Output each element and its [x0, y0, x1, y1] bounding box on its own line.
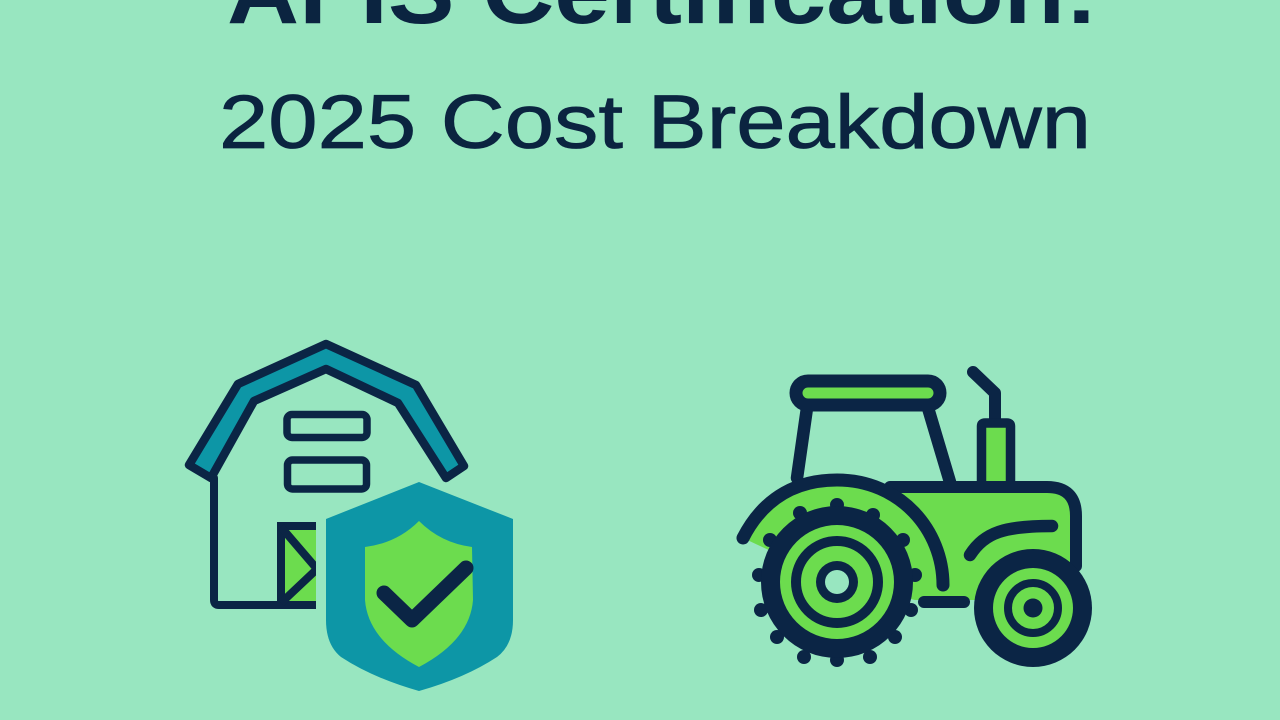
- tractor body: [743, 480, 1076, 600]
- step bar: [924, 596, 964, 608]
- hood outline: [890, 487, 1076, 566]
- barn windows: [287, 414, 367, 489]
- front wheel: [974, 549, 1092, 667]
- fender: [743, 480, 943, 585]
- barn wall: [214, 478, 280, 605]
- subtitle: 2025 Cost Breakdown: [219, 80, 1091, 165]
- exhaust stack: [973, 372, 1010, 484]
- rear wheel: [752, 498, 922, 667]
- barn roof: [189, 344, 464, 478]
- shield inner: [365, 521, 473, 667]
- icon: barn with shield: [189, 344, 513, 691]
- cab posts: [797, 408, 950, 482]
- canopy: [796, 381, 940, 405]
- hood curve: [970, 526, 1052, 555]
- check mark: [384, 568, 466, 620]
- shield: [326, 482, 513, 691]
- icon: tractor: [743, 372, 1092, 667]
- barn door: [277, 522, 316, 609]
